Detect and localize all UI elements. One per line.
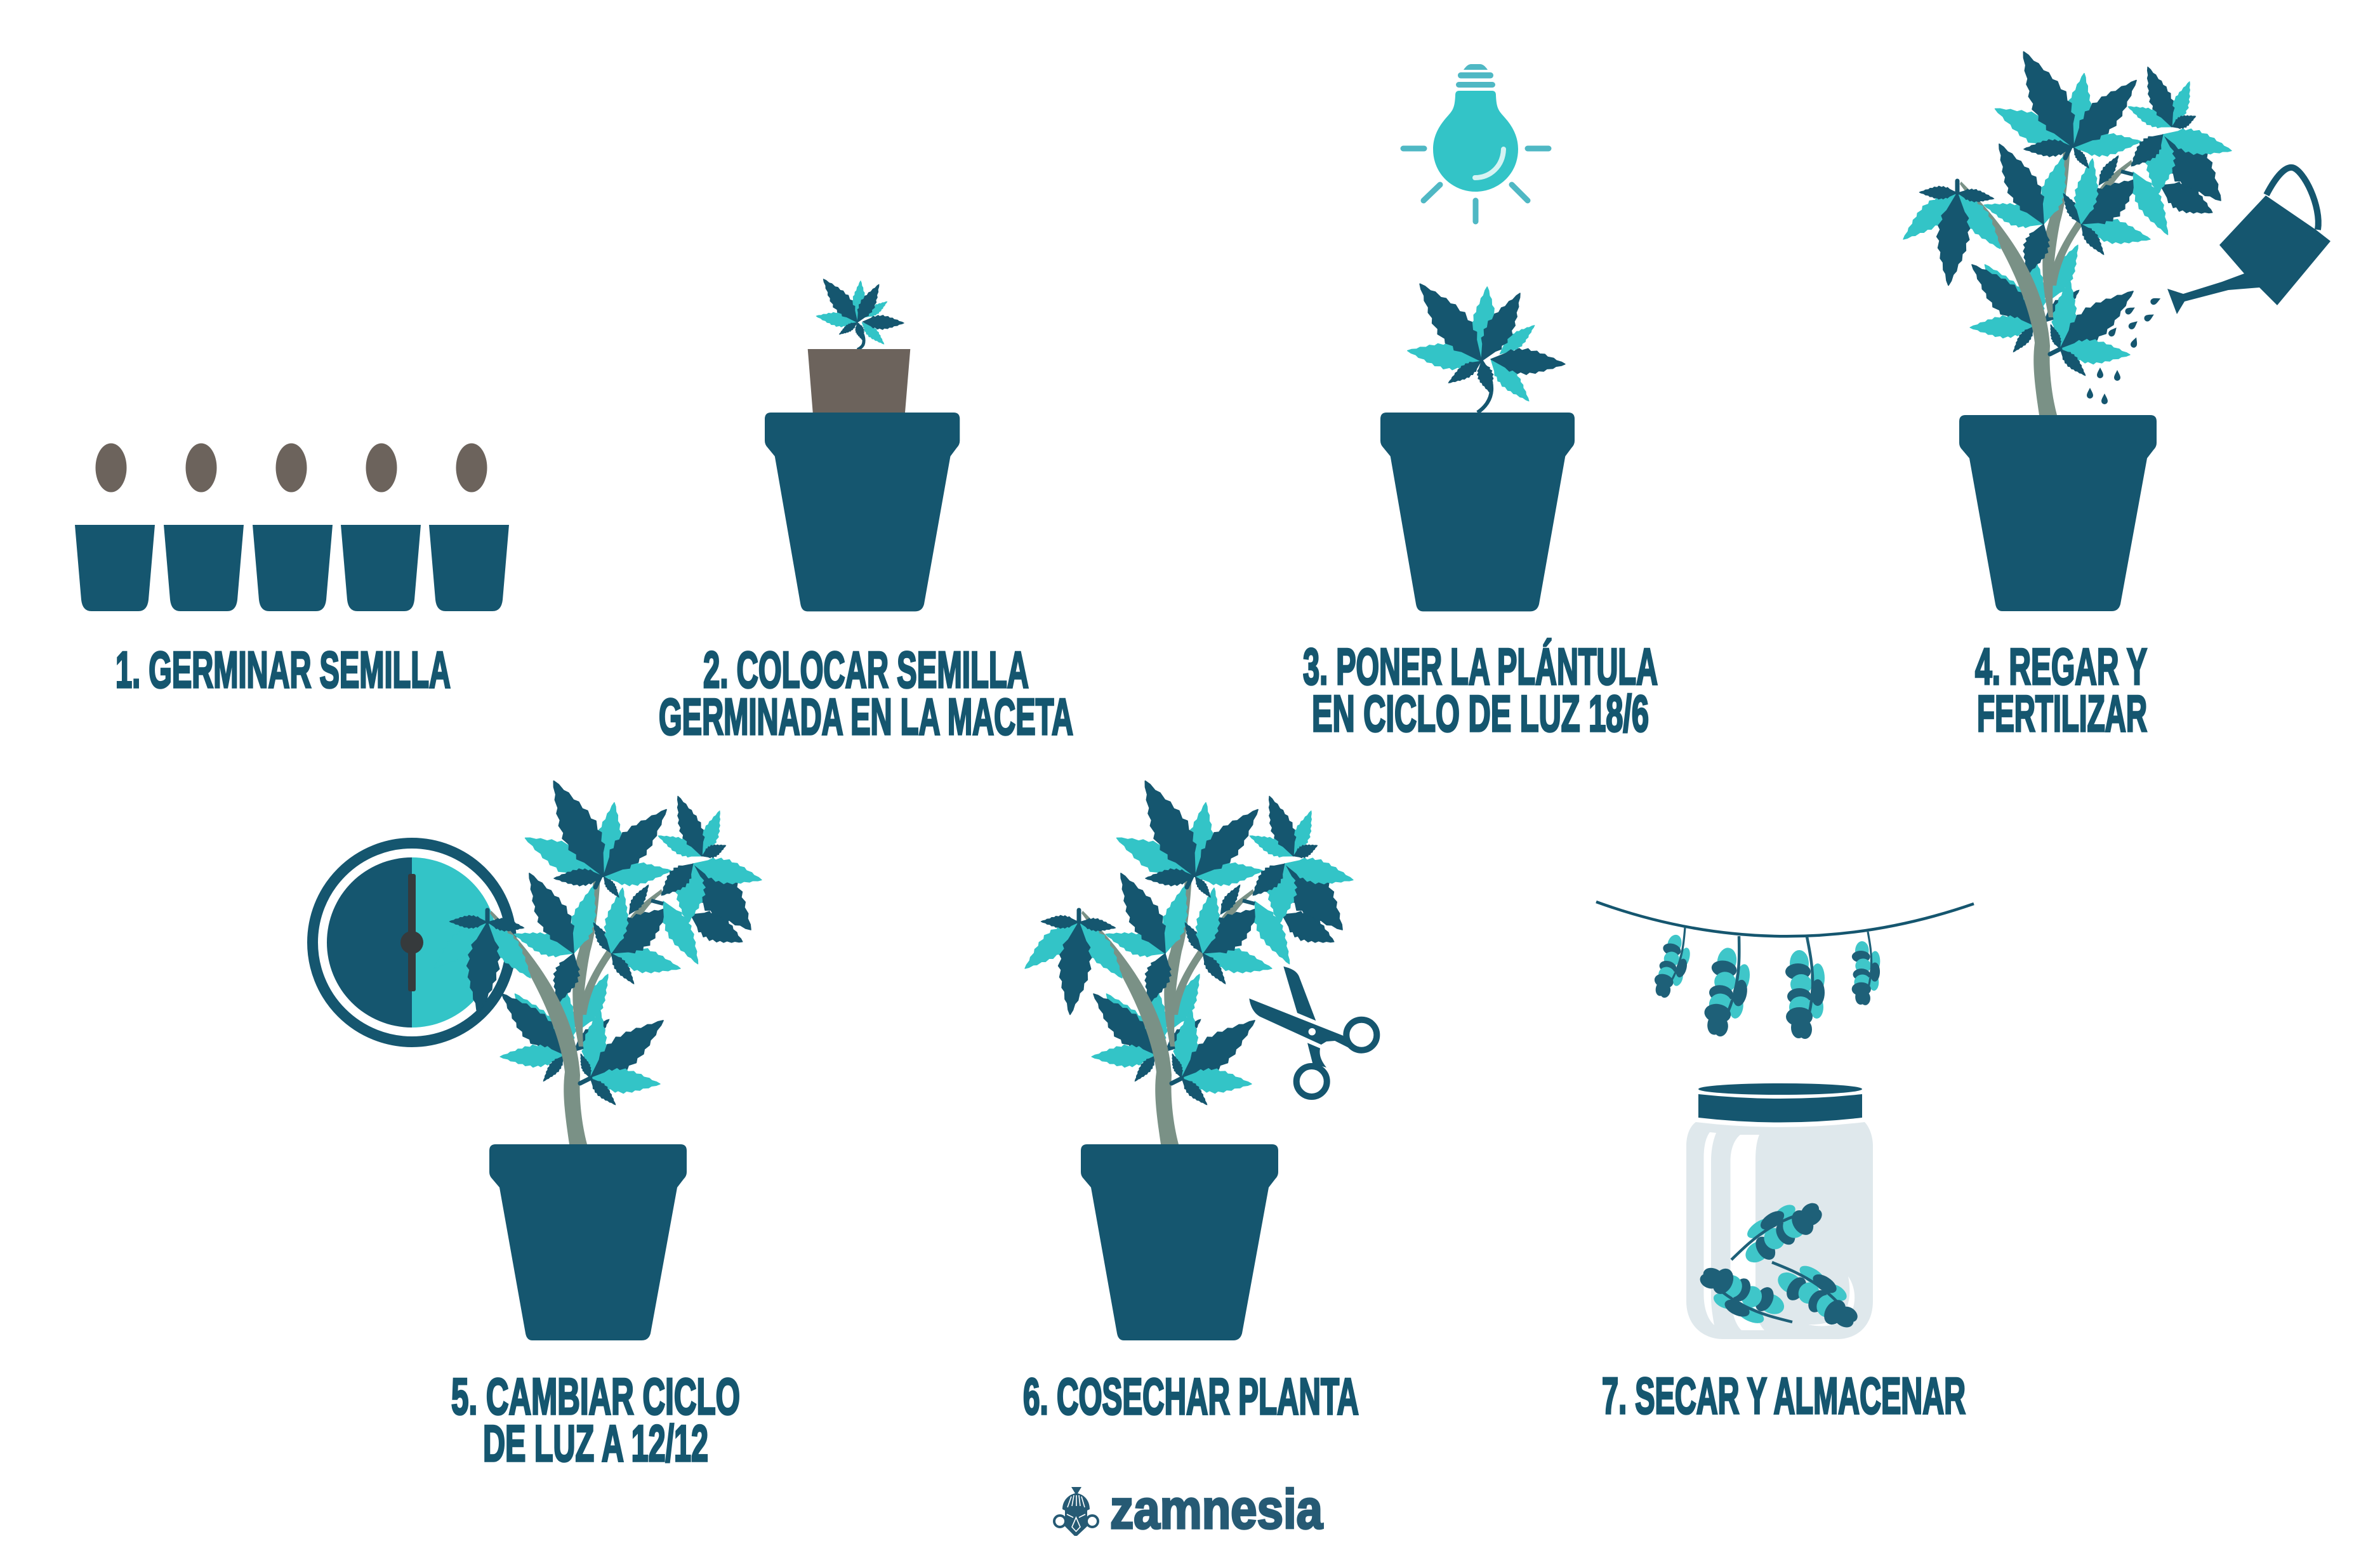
small brown pot [808, 349, 910, 413]
step 2: pot with germinated seed [765, 273, 960, 611]
label: step 5: DE LUZ A 12/12 [483, 1415, 708, 1472]
label: step 4: 4. REGAR Y [1975, 638, 2147, 696]
label: step 3: 3. PONER LA PLÁNTULA [1303, 638, 1658, 696]
step 3: plantlet and pot [1380, 273, 1575, 611]
step 7: storage jar [1686, 1083, 1873, 1339]
cups [75, 525, 509, 611]
plantlet [1406, 273, 1566, 413]
jar lid [1698, 1083, 1862, 1122]
bulb screw base [1456, 64, 1495, 88]
label: step 1: 1. GERMINAR SEMILLA [116, 642, 451, 699]
pot [1081, 1144, 1278, 1340]
logo: zamnesia [1054, 1479, 1323, 1540]
logo wordmark: zamnesia [1110, 1479, 1323, 1540]
step 4: plant in pot [1895, 43, 2237, 611]
label: step 5: 5. CAMBIAR CICLO [451, 1368, 740, 1425]
step 7: hanging string with drying buds [1596, 902, 1974, 1040]
icon: watering can [2167, 168, 2330, 314]
pot [1380, 413, 1575, 611]
rays [1403, 149, 1549, 221]
label: step 6: 6. COSECHAR PLANTA [1023, 1368, 1359, 1425]
icon: clock half dark half light [312, 843, 512, 1042]
pot [489, 1144, 687, 1340]
step 1: seeds and cups [75, 443, 509, 611]
highlight [1475, 149, 1504, 178]
large pot [765, 413, 960, 611]
seedling [815, 273, 904, 350]
step 5: plant in pot [425, 772, 767, 1340]
icon: water drops [2087, 296, 2162, 404]
label: step 5 [451, 1368, 740, 1472]
jar glass [1686, 1122, 1873, 1339]
label: step 3 [1303, 638, 1658, 743]
step 6: plant in pot [1017, 772, 1358, 1340]
icon: scissors [1249, 967, 1377, 1097]
label: step 2: GERMINADA EN LA MACETA [659, 689, 1073, 746]
bulb body [1433, 91, 1518, 192]
stored buds [1692, 1189, 1867, 1338]
label: step 2: 2. COLOCAR SEMILLA [703, 642, 1029, 699]
label: step 4 [1975, 638, 2147, 743]
step 3: light bulb [1403, 64, 1549, 221]
label: step 3: EN CICLO DE LUZ 18/6 [1312, 685, 1649, 743]
label: step 4: FERTILIZAR [1977, 685, 2147, 743]
label: step 2 [659, 642, 1073, 746]
logo mask [1054, 1487, 1098, 1536]
glass highlights [1703, 1132, 1854, 1330]
seeds [95, 443, 487, 492]
label: step 7: 7. SECAR Y ALMACENAR [1602, 1368, 1966, 1425]
pot [1959, 415, 2157, 611]
